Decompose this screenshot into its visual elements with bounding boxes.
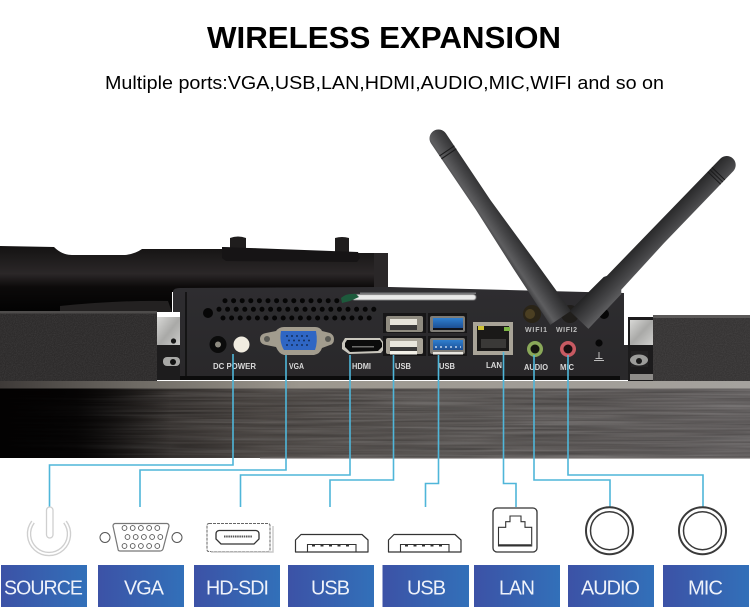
port labels on panel: WIFI1 xyxy=(525,327,547,334)
LAN port xyxy=(473,322,513,355)
port labels on panel: DC POWER xyxy=(213,362,256,371)
label: LAN xyxy=(474,565,560,607)
icon: LAN connector xyxy=(493,508,537,552)
rear tube with mount xyxy=(0,236,388,312)
label: SOURCE xyxy=(1,565,87,607)
rear panel of the box xyxy=(173,287,628,380)
label: MIC xyxy=(663,565,749,607)
reflection on front rod xyxy=(341,292,476,303)
vent holes xyxy=(206,301,606,318)
label: USB: USB xyxy=(311,576,349,600)
right side panel xyxy=(628,315,750,382)
icon: HD-SDI connector xyxy=(207,524,273,552)
port labels on panel: HDMI xyxy=(352,362,371,371)
label: VGA xyxy=(98,565,184,607)
ground screw xyxy=(594,339,604,360)
port labels on panel: USB xyxy=(395,362,411,371)
label: SOURCE: SOURCE xyxy=(4,576,82,600)
icon: USB connector xyxy=(296,534,368,552)
port labels on panel xyxy=(213,327,577,372)
device photo xyxy=(0,124,750,459)
connector lines xyxy=(50,352,703,507)
port labels on panel: WIFI2 xyxy=(556,327,577,334)
USB 3.0 ports xyxy=(428,313,467,356)
port labels on panel: VGA xyxy=(289,362,304,371)
antenna: WiFi 2 xyxy=(570,150,743,329)
port labels on panel: USB xyxy=(439,362,455,371)
icon: USB connector 2 xyxy=(388,534,461,552)
port labels on panel: LAN xyxy=(486,361,502,370)
subtitle: Multiple ports:VGA,USB,LAN,HDMI,AUDIO,MIC,WIFI and so on xyxy=(105,72,664,93)
mic jack xyxy=(560,341,576,357)
HDMI port xyxy=(342,338,384,354)
port labels on panel: MIC xyxy=(560,363,574,372)
antenna: WiFi 1 xyxy=(424,124,571,325)
label: MIC: MIC xyxy=(688,576,723,600)
WiFi connectors xyxy=(523,305,579,323)
power button xyxy=(234,336,250,352)
label: USB second xyxy=(382,565,469,607)
label: LAN: LAN xyxy=(499,576,534,600)
DC jack xyxy=(210,336,226,353)
title: WIRELESS EXPANSION xyxy=(207,20,561,55)
USB ports xyxy=(383,313,426,356)
icon: VGA connector xyxy=(100,524,182,551)
label: USB second: USB xyxy=(407,576,445,600)
brushed metal base xyxy=(0,381,750,459)
icon: power source xyxy=(29,507,69,554)
label: AUDIO xyxy=(568,565,654,607)
label: AUDIO: AUDIO xyxy=(581,576,639,600)
label: HD-SDI: HD-SDI xyxy=(206,576,268,600)
audio jack xyxy=(527,341,543,357)
left side panel xyxy=(0,311,181,381)
icon: mic ring xyxy=(679,507,726,554)
port labels on panel: AUDIO xyxy=(524,363,548,372)
icon: audio ring xyxy=(586,507,633,554)
label: USB xyxy=(288,565,374,607)
VGA port xyxy=(260,327,334,355)
label: HD-SDI xyxy=(194,565,280,607)
label: VGA: VGA xyxy=(124,576,164,600)
